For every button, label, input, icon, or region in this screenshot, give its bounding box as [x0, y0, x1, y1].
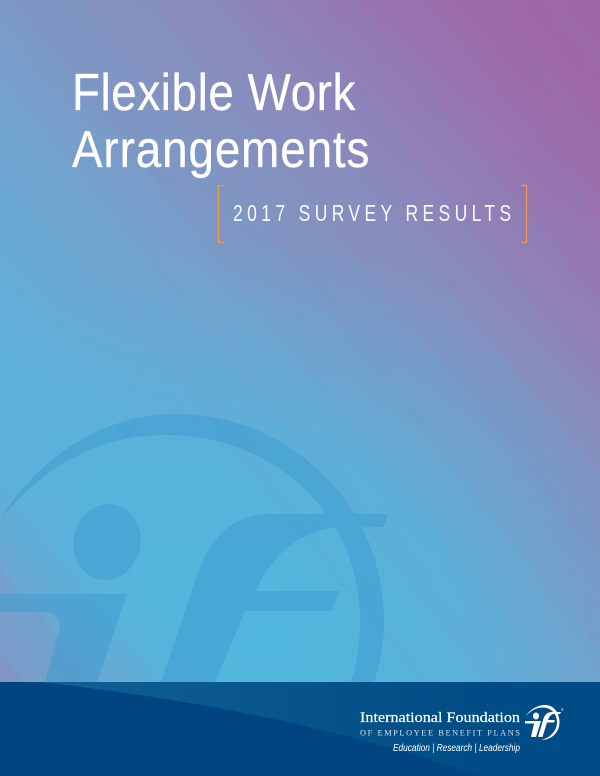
logo mark — [525, 705, 564, 740]
title: Flexible Work — [72, 64, 356, 122]
organization name: International Foundation — [360, 710, 521, 726]
logo mark: ® — [561, 708, 564, 712]
title: Arrangements — [72, 121, 369, 179]
title — [72, 64, 369, 179]
footer logo — [360, 705, 564, 754]
watermark logo — [0, 414, 388, 682]
footer band — [0, 682, 600, 776]
subtitle with brackets — [218, 186, 526, 242]
watermark f — [161, 514, 388, 682]
subtitle with brackets: 2017 SURVEY RESULTS — [233, 202, 511, 227]
watermark i — [0, 498, 148, 682]
organization subtitle: OF EMPLOYEE BENEFIT PLANS — [360, 728, 520, 738]
watermark ring — [0, 414, 384, 682]
tagline: Education | Research | Leadership — [393, 743, 520, 754]
